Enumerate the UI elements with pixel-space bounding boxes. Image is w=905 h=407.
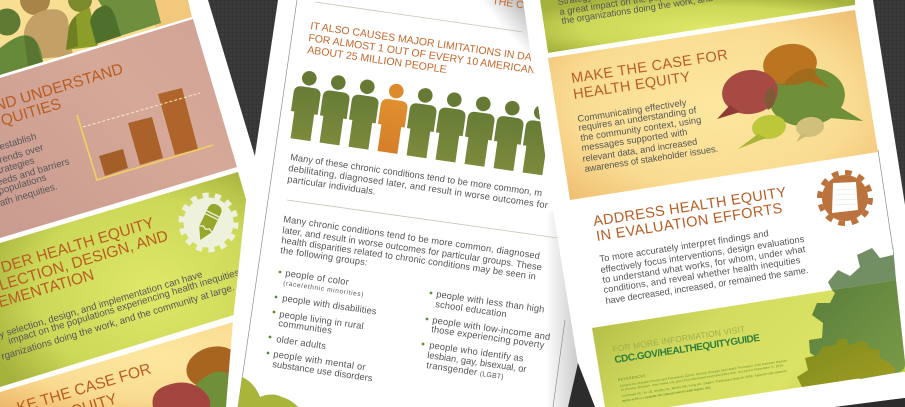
list: groups left column: substance use disorders bbox=[272, 359, 373, 383]
text block: communicating effectively: Communicating effectively bbox=[577, 97, 687, 124]
heading: major limitations: IT ALSO CAUSES MAJOR LIMITATIONS IN DA bbox=[310, 20, 532, 64]
list: groups right column: people with less than high bbox=[436, 289, 545, 315]
list: groups left column: people with mental or bbox=[273, 349, 366, 372]
list: groups right column: people who identify as bbox=[429, 340, 525, 364]
text block: evaluation: to understand what works, for whom, under what bbox=[602, 244, 806, 285]
heading: major limitations: FOR ALMOST 1 OUT OF EVERY 10 AMERICAN bbox=[308, 32, 536, 77]
panel: left page bbox=[0, 0, 255, 407]
references: reports; vol 59 no 4. Hyattsville, MD: National Center for Health Statistics. 2011 bbox=[622, 385, 711, 403]
references bbox=[618, 358, 788, 403]
text block: selection impact: y selection, design, and implementation can have bbox=[0, 269, 204, 341]
text block: chronic conditions groups: the following groups: bbox=[280, 245, 368, 268]
panel: people illustration band bbox=[0, 0, 192, 75]
text block: communicating effectively bbox=[577, 97, 719, 174]
list: groups right column: those experiencing poverty bbox=[431, 324, 545, 350]
list: groups left column: communities bbox=[278, 318, 333, 336]
references: REFERENCES bbox=[618, 374, 646, 382]
heading: for more information: FOR MORE INFORMATION VISIT bbox=[612, 324, 746, 354]
text block: communicating effectively: requires an understanding of bbox=[578, 105, 697, 133]
heading: make the case: MAKE THE CASE FOR bbox=[570, 47, 729, 87]
panel: make the case lower fragment bbox=[0, 308, 320, 407]
text block: chronic conditions groups bbox=[280, 214, 542, 282]
heading: consider health equity bbox=[0, 215, 170, 311]
cloud shape bottom left bbox=[238, 377, 298, 407]
list: groups left column: people living in rural bbox=[279, 309, 364, 331]
page curl shadow bbox=[470, 0, 553, 100]
link: cdc.gov: CDC.GOV/HEALTHEQUITYGUIDE bbox=[614, 333, 761, 366]
panel: middle page bbox=[226, 0, 600, 407]
panel: right page bbox=[523, 0, 905, 407]
heading: address health equity: IN EVALUATION EFFORTS bbox=[595, 201, 783, 245]
icon: large and small gears bbox=[797, 245, 905, 387]
text block: communicating effectively: the community context, using bbox=[580, 115, 702, 143]
text block: chronic conditions intro: debilitating, diagnosed later, and result in worse outcomes for bbox=[288, 163, 548, 210]
text block: chronic conditions intro: particular individuals. bbox=[287, 174, 376, 197]
list: groups left column bbox=[267, 268, 378, 383]
panel: address health equity in evaluation bbox=[592, 172, 870, 306]
text block: establish trends bbox=[0, 131, 71, 209]
icon: notepad gear bbox=[820, 172, 870, 224]
text block: evaluation: conditions, and reveal whether health inequities bbox=[603, 255, 801, 295]
panel: identify and understand inequities bbox=[0, 19, 237, 238]
text block: evaluation bbox=[599, 228, 809, 306]
icon: pencil gear bbox=[182, 196, 236, 250]
icon: speech bubbles bbox=[717, 40, 863, 149]
list: groups left column: (race/ethnic minorities) bbox=[283, 280, 364, 299]
heading: consider health equity: LECTION, DESIGN, AND bbox=[0, 228, 170, 294]
list: groups right column: school education bbox=[435, 299, 507, 319]
page frame line bbox=[238, 0, 565, 407]
list: groups right column: transgender (LGBT) bbox=[426, 360, 504, 381]
text block: communicating effectively: relevant data, and increased bbox=[582, 137, 698, 164]
text block: chronic conditions intro: Many of these chronic conditions tend to be more common, m bbox=[290, 152, 543, 198]
text block: evaluation: effectively focus interventions, design evaluations bbox=[600, 234, 805, 275]
references: Kochanek KD, Xu JQ, Murphy SL, Miniño AM, Kung HC. Deaths: Preliminary Data for 2009. National vital statistics bbox=[622, 369, 788, 398]
list: groups right column: people with low-income and bbox=[432, 315, 551, 342]
panel: consider health equity bbox=[0, 172, 276, 387]
list: groups left column: older adults bbox=[276, 334, 327, 351]
text block: chronic conditions groups: health disparities related to chronic conditions may be seen in bbox=[281, 235, 537, 282]
text block: chronic conditions groups: later, and result in worse outcomes for particular groups. These bbox=[282, 225, 542, 272]
text block: establish trends: ath inequities. bbox=[0, 181, 59, 209]
heading: major limitations: ABOUT 25 MILLION PEOPLE bbox=[307, 44, 447, 76]
panel: strategy band fragment bbox=[540, 0, 855, 53]
dark corner bottom right bbox=[835, 398, 905, 407]
references: Centers for Disease Control and Prevention (CDC). Chronic Disease and Health Promotion: Five Common Causes bbox=[620, 358, 788, 388]
references: of Chronic Disease. http://www.cdc.gov/chronicdisease/overview/index.htm. Accessed September 6, 2015. bbox=[621, 363, 784, 392]
heading: make the case: HEALTH EQUITY bbox=[572, 69, 692, 103]
list: groups right column bbox=[422, 289, 551, 381]
panel: more information footer bbox=[592, 245, 905, 407]
text block: selection impact: rganizations doing the work, and the community at large. bbox=[0, 282, 236, 363]
pictogram: one in ten people bbox=[287, 69, 556, 176]
text block: communicating effectively: messages supported with bbox=[581, 127, 688, 153]
icon: speech bubbles bbox=[152, 340, 250, 407]
list: groups left column: people of color bbox=[285, 268, 349, 287]
heading: consider health equity: DER HEALTH EQUITY bbox=[0, 215, 156, 277]
list: groups right column: lesbian, gay, bisexual, or bbox=[427, 350, 527, 374]
text block: selection impact: impact on the populations experiencing health inequities bbox=[7, 267, 241, 347]
lower page curl shadow bbox=[545, 210, 580, 407]
text block: communicating effectively: awareness of stakeholder issues. bbox=[584, 144, 719, 174]
panel: make the case for health equity bbox=[548, 10, 878, 200]
text block: chronic conditions groups: Many chronic conditions tend to be more common, diagnosed bbox=[283, 214, 540, 261]
heading: address health equity: ADDRESS HEALTH EQUITY bbox=[592, 185, 788, 230]
text block: evaluation: To more accurately interpret findings and bbox=[599, 228, 769, 264]
text block: evaluation: have decreased, increased, or remained the same. bbox=[605, 265, 809, 306]
heading: understand inequities: QUITIES bbox=[0, 96, 63, 130]
bar chart bbox=[77, 88, 213, 180]
dark wedge between pages bbox=[568, 363, 595, 407]
list: groups left column: people with disabilities bbox=[282, 293, 378, 317]
right page frame line bbox=[878, 150, 893, 250]
